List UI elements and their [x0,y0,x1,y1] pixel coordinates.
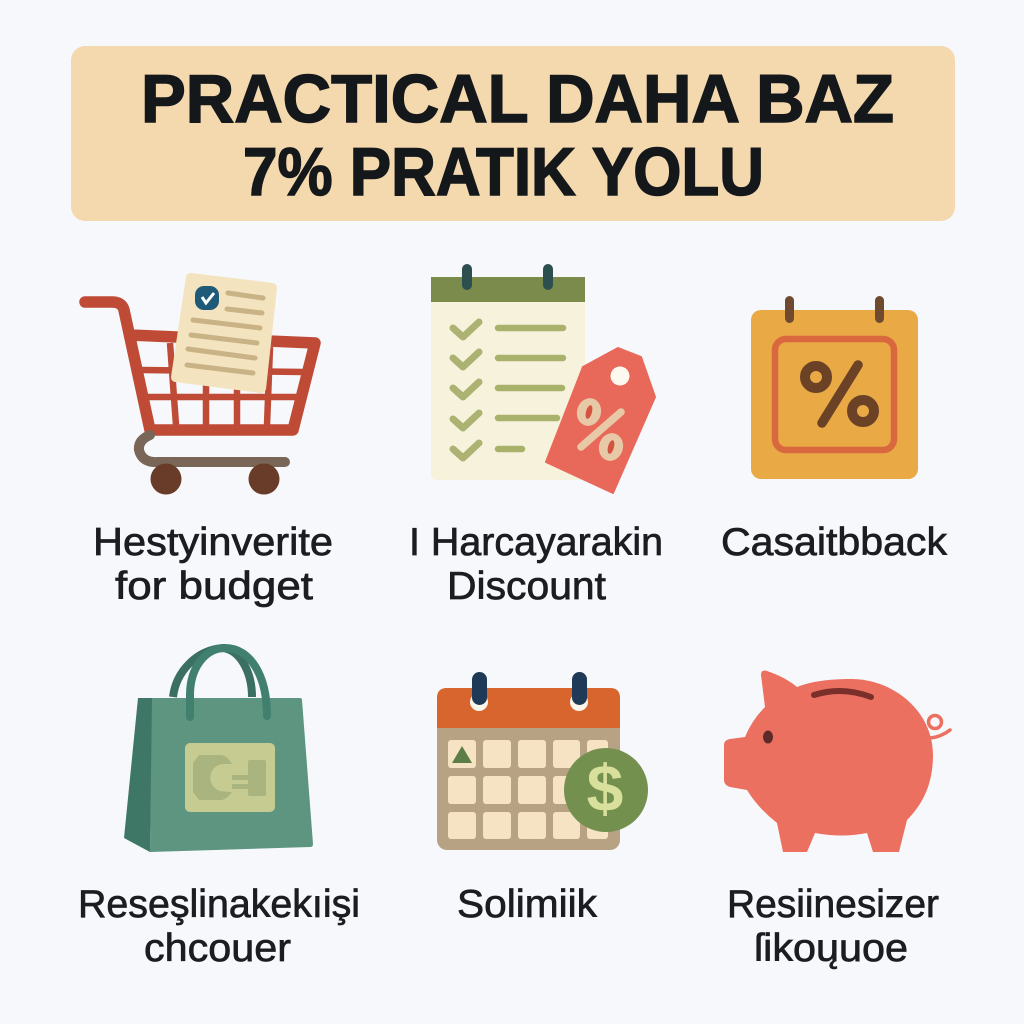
dollar sign: $ [587,751,623,825]
calendar body [437,688,620,850]
label: discount line 2: Discount [447,565,606,608]
triangle marker [452,746,472,763]
icon: checklist and discount tag [431,264,655,493]
check marks [453,322,479,458]
cart wheels [150,464,280,494]
calendar header [437,688,620,728]
checklist rings [462,264,553,290]
coin slot [814,691,871,697]
label: discount line 1: I Harcayarakin [409,521,663,564]
label: voucher line 2: chcouer [144,927,291,970]
ring holes [470,693,588,711]
label: calendar: Solimiik [457,883,598,926]
checklist paper [431,277,585,480]
title line 2: 7% PRATIK YOLU [243,134,764,210]
checklist header [431,277,585,302]
label: budget line 1: Hestyinverite [93,521,333,564]
label: savings line 2: ſikoųuoe [754,927,908,970]
pig tail [928,716,950,738]
icon: calendar with dollar coin [437,672,648,850]
icon: shopping cart with list [85,273,315,494]
back handle [173,648,252,697]
calendar cells [448,740,608,839]
label: savings line 1: Resiinesizer [727,883,939,926]
calendar body [751,310,918,479]
icon: piggy bank [724,670,950,852]
cart lower rail [139,435,285,462]
bag front [150,698,313,852]
check badge [195,286,219,310]
checklist lines [498,328,563,449]
bag side [124,698,153,852]
title banner [71,46,955,221]
cart wire grid [142,343,303,425]
dollar coin [564,748,648,832]
title line 1: PRACTICAL DAHA BAZ [141,61,894,137]
bag logo [193,755,266,800]
label: voucher line 1: Reseşlinakekıişi [78,883,360,926]
calendar rings [785,296,884,323]
inner frame [775,339,894,450]
bag label [185,743,275,812]
pig eye [763,730,773,744]
discount tag [546,348,655,493]
front handle [190,648,267,717]
cart frame [85,302,315,430]
calendar rings [472,672,587,705]
icon: green shopping bag [124,648,313,852]
icon: percent calendar [751,296,918,479]
receipt paper [171,273,277,393]
tag hole [610,366,630,386]
receipt lines [187,293,263,373]
tag percent sign [574,395,626,464]
percent sign [805,365,874,423]
label: cashback: Casaitbback [721,521,948,564]
pig body [724,670,933,852]
label: budget line 2: for budget [115,565,313,608]
